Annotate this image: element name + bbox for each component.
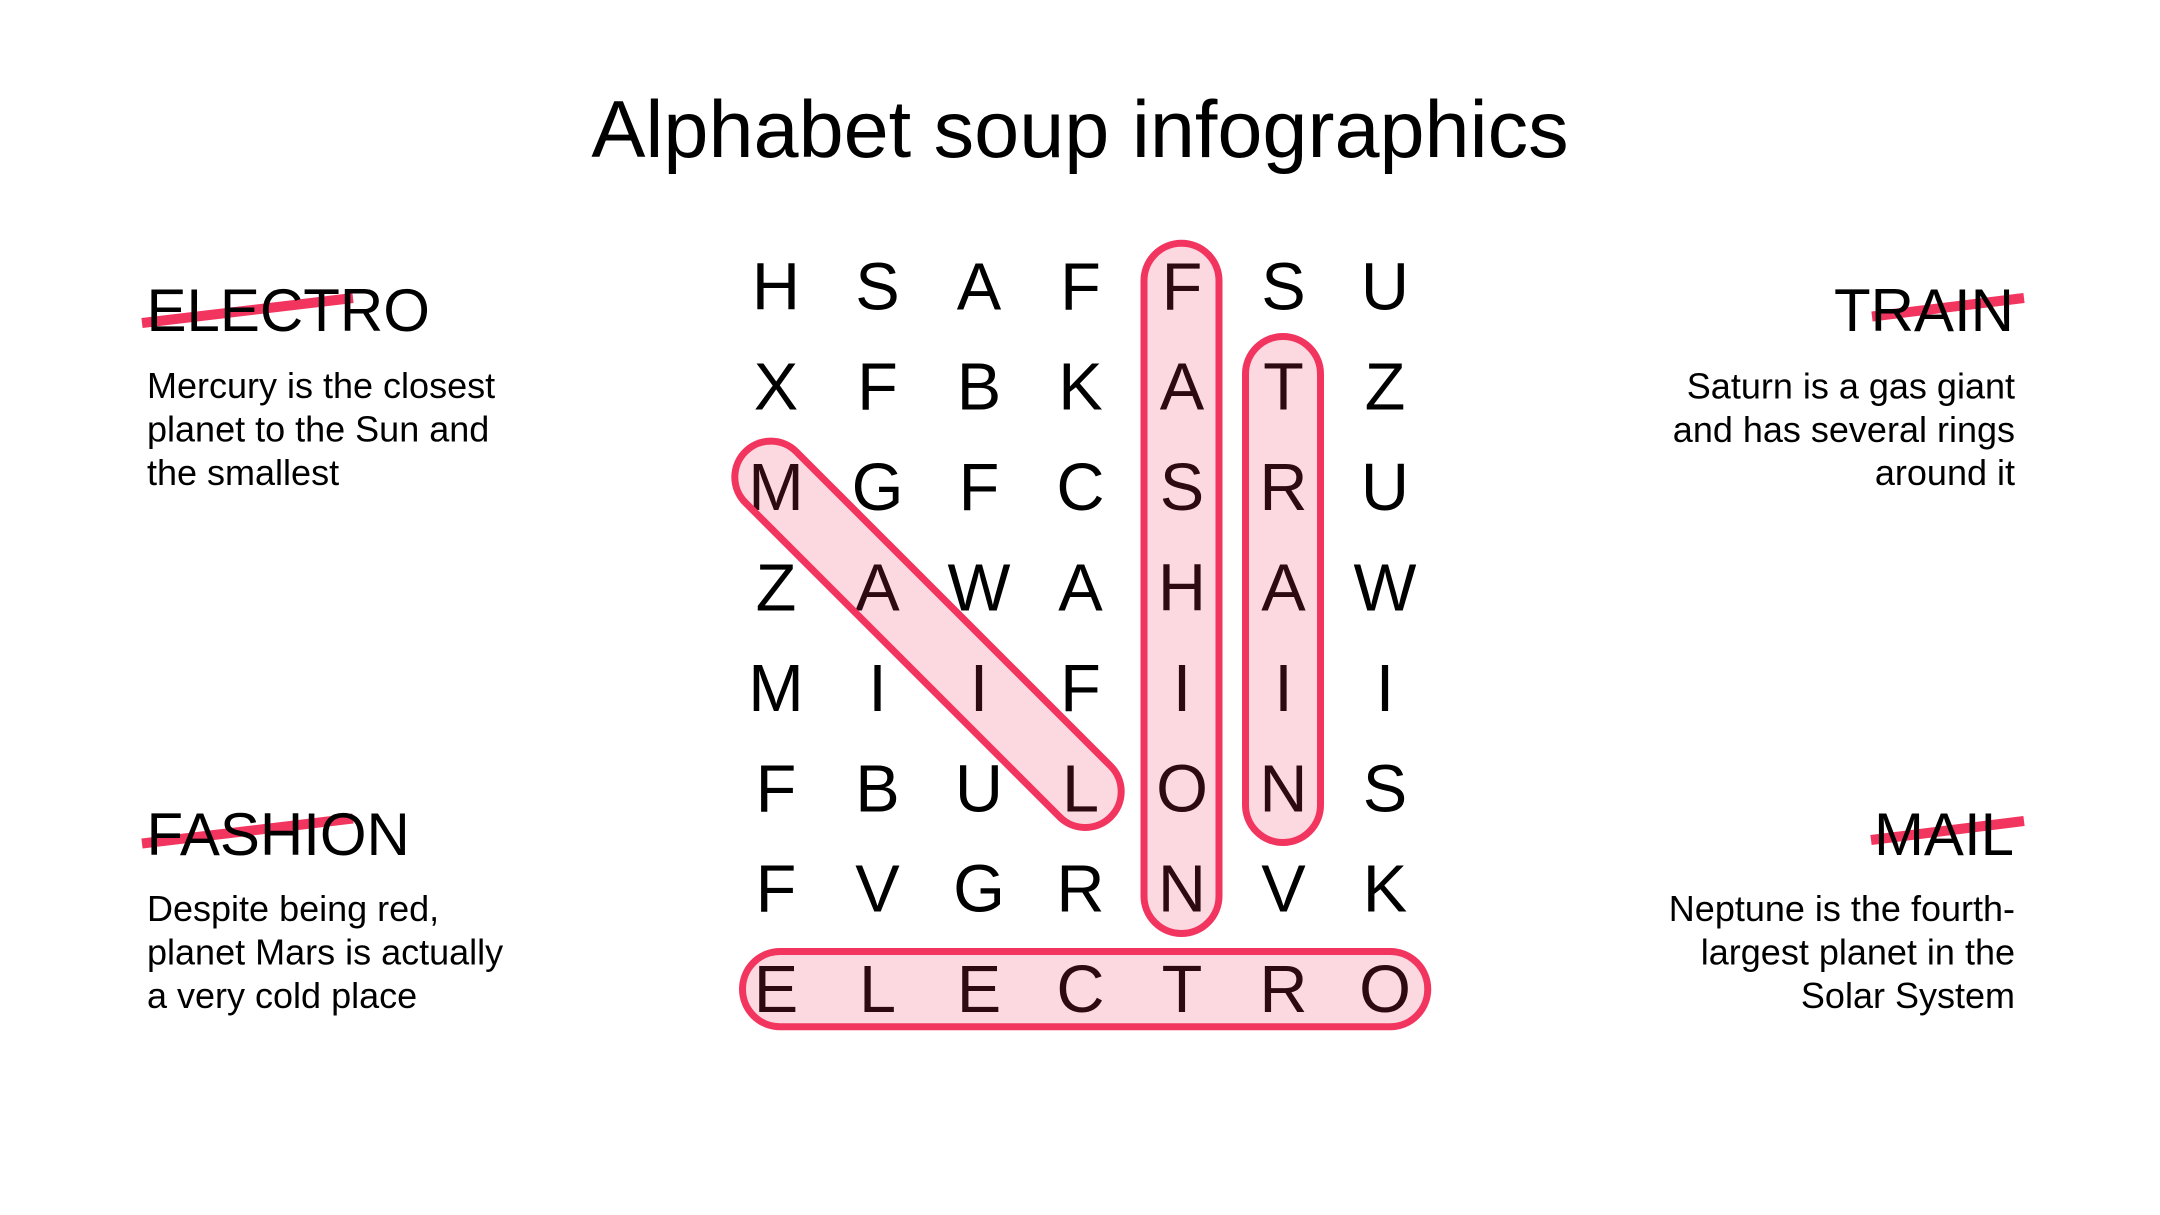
strike line: ELECTRO (142, 298, 353, 323)
letter grid: E (957, 953, 1001, 1027)
letter grid: G (852, 451, 903, 525)
letter grid: F (1060, 250, 1101, 324)
letter grid: I (1274, 652, 1293, 726)
letter grid: O (1156, 752, 1208, 826)
letter grid: Z (1365, 351, 1405, 425)
letter grid: U (1361, 250, 1409, 324)
letter grid: T (1263, 351, 1304, 425)
letter grid: A (1160, 351, 1205, 425)
letter grid: M (748, 652, 804, 726)
text block: Mars: planet Mars is actually (147, 932, 503, 972)
letter grid: A (1261, 552, 1306, 626)
letter grid: L (859, 953, 896, 1027)
letter grid: O (1359, 953, 1411, 1027)
heading: FASHION: FASHION (146, 801, 410, 868)
letter grid: S (855, 250, 900, 324)
letter grid: V (855, 853, 900, 927)
letter grid: R (1056, 853, 1105, 927)
letter grid: C (1056, 451, 1105, 525)
letter grid: I (868, 652, 887, 726)
text block: Neptune: Neptune is the fourth- (1669, 888, 2015, 929)
letter grid: S (1261, 250, 1306, 324)
panel: MAIL clue (1669, 801, 2024, 1016)
text block: Neptune: largest planet in the (1701, 932, 2015, 972)
letter grid: N (1158, 853, 1206, 927)
letter grid: H (1158, 552, 1206, 626)
letter grid: N (1259, 752, 1308, 826)
letter grid: A (855, 552, 900, 626)
panel: ELECTRO clue (142, 277, 495, 493)
letter grid: I (1173, 652, 1191, 726)
letter grid: U (955, 752, 1003, 826)
letter grid: H (752, 250, 800, 324)
letter grid: G (953, 853, 1005, 927)
text block: Saturn: Saturn is a gas giant (1687, 366, 2015, 406)
strike line: FASHION (142, 818, 353, 844)
letter grid: E (754, 953, 798, 1027)
letter grid: S (1363, 752, 1407, 826)
text block: Mercury: the smallest (147, 452, 339, 493)
letter grid: R (1259, 451, 1308, 525)
letter grid: F (1060, 652, 1101, 726)
letter grid: B (957, 351, 1001, 425)
letter grid (748, 250, 1417, 1027)
letter grid: W (1354, 552, 1417, 626)
panel: TRAIN clue (1673, 277, 2024, 493)
letter grid: A (1058, 552, 1103, 626)
highlight: TRAIN vertical (1246, 336, 1320, 842)
letter grid: Z (756, 552, 796, 626)
letter grid: I (1376, 652, 1394, 726)
text block: Mars: Despite being red, (147, 888, 439, 929)
letter grid: C (1056, 953, 1105, 1027)
text block: Saturn: and has several rings (1673, 409, 2015, 450)
letter grid: V (1261, 853, 1306, 927)
letter grid: F (959, 451, 999, 525)
letter grid: I (970, 652, 988, 726)
text block: Mercury: Mercury is the closest (147, 365, 495, 406)
letter grid: F (1162, 250, 1202, 324)
strike line: MAIL (1871, 821, 2024, 840)
heading: ELECTRO: ELECTRO (146, 277, 430, 344)
letter grid: F (756, 853, 796, 927)
letter grid: U (1361, 451, 1409, 525)
letter grid: F (857, 351, 898, 425)
highlight: ELECTRO horizontal (742, 952, 1428, 1027)
highlight: FASHION vertical (1144, 243, 1219, 934)
letter grid: X (754, 351, 798, 425)
letter grid: L (1062, 752, 1099, 826)
letter grid: T (1162, 953, 1202, 1027)
letter grid: W (948, 552, 1011, 626)
strike line: TRAIN (1872, 298, 2024, 316)
letter grid: F (756, 752, 796, 826)
letter grid: M (748, 451, 804, 525)
text block: Mars: a very cold place (147, 975, 417, 1016)
heading: MAIL: MAIL (1874, 801, 2014, 868)
text block: Mercury: planet to the Sun and (147, 408, 489, 450)
panel: FASHION clue (142, 801, 503, 1016)
letter grid: A (957, 250, 1002, 324)
title: Alphabet soup infographics (591, 85, 1569, 175)
text block: Neptune: Solar System (1801, 975, 2015, 1016)
letter grid: R (1259, 953, 1308, 1027)
letter grid: K (1363, 853, 1407, 927)
heading: TRAIN: TRAIN (1834, 277, 2014, 344)
highlight: MAIL diagonal (720, 426, 1136, 842)
letter grid: S (1160, 451, 1204, 525)
letter grid: K (1058, 351, 1103, 425)
text block: Saturn: around it (1875, 452, 2015, 493)
letter grid: B (855, 752, 900, 826)
